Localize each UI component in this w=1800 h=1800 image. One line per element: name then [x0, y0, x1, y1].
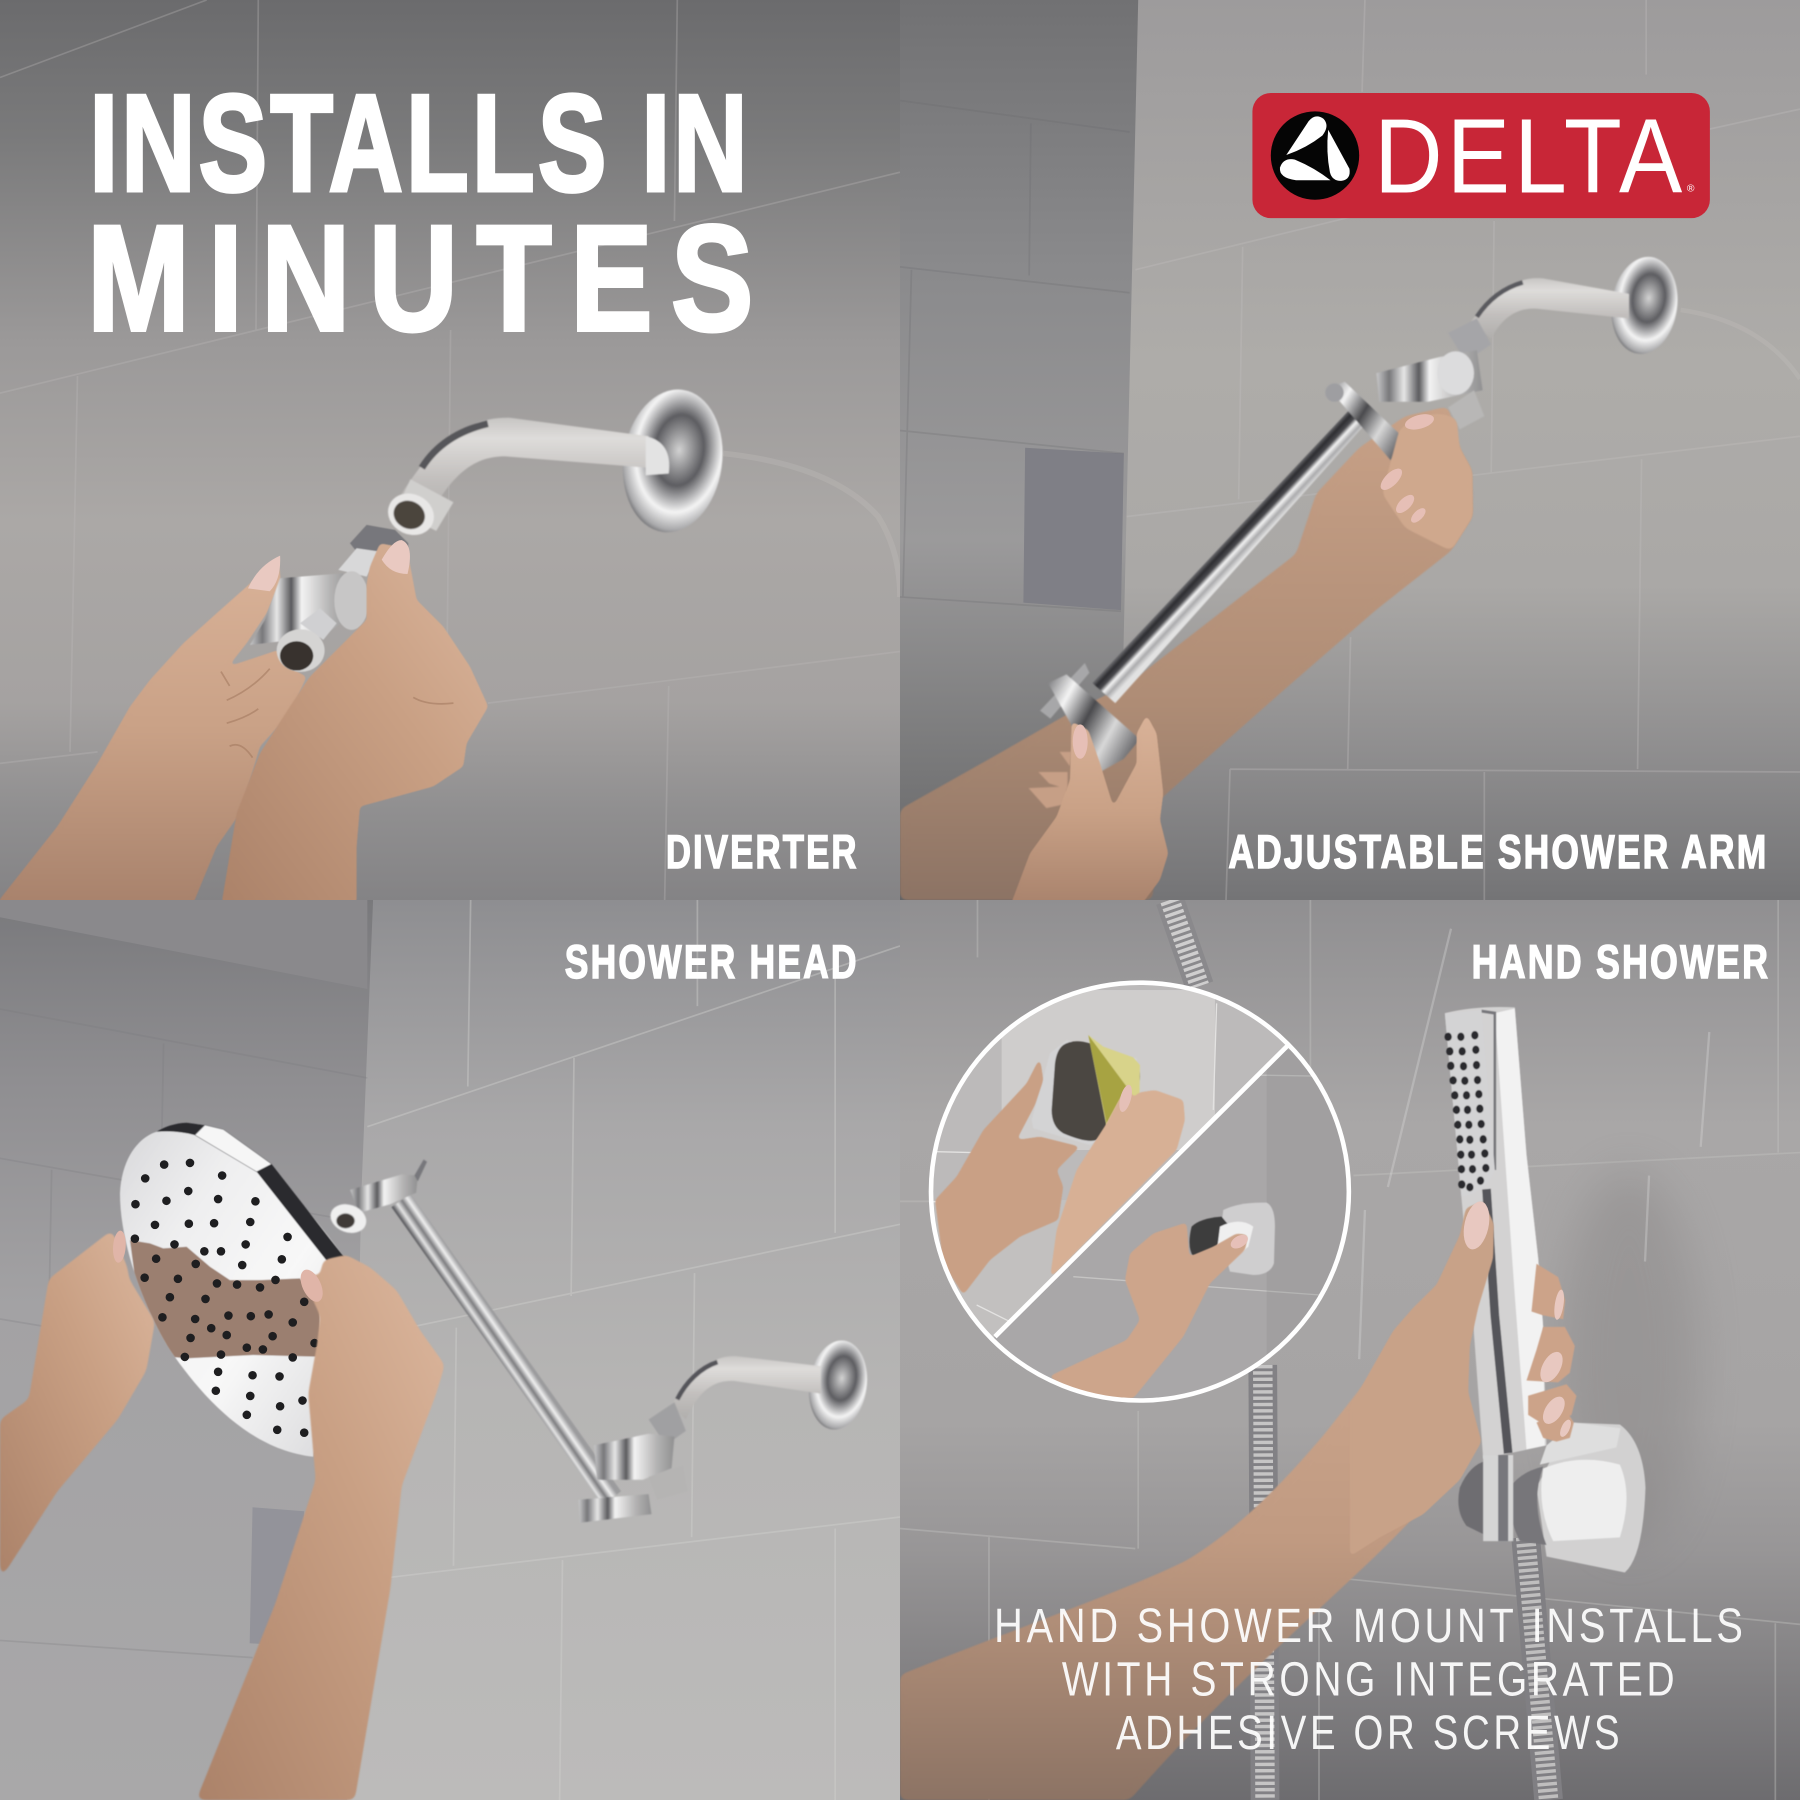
fingernail	[1228, 1232, 1250, 1251]
finger creases	[221, 669, 453, 758]
circle border	[931, 983, 1349, 1401]
forearm and upper hand	[900, 406, 1473, 900]
spray nozzles	[135, 1163, 315, 1433]
hose	[1170, 900, 1549, 1800]
title: MINUTES	[87, 194, 772, 362]
shower arm fixture	[579, 1337, 873, 1523]
fingernail	[1119, 1084, 1132, 1112]
fingers	[1527, 1264, 1576, 1442]
title	[87, 67, 772, 362]
wall background	[0, 0, 900, 900]
wall background	[900, 0, 1800, 900]
shower arm fixture	[381, 383, 732, 542]
right hand and arm	[196, 1255, 445, 1800]
right hand	[222, 543, 488, 903]
caption: ADHESIVE OR SCREWS	[1116, 1706, 1623, 1760]
hand shower	[1350, 1007, 1645, 1573]
inset lower wall	[1073, 1074, 1319, 1296]
wall mount	[1189, 1203, 1275, 1275]
diverter body	[250, 525, 408, 672]
panel: hand shower	[900, 900, 1800, 1800]
logo wordmark: DELTA	[1374, 97, 1686, 215]
adjustable rod	[1040, 382, 1408, 775]
lower hand fingers	[1029, 752, 1071, 808]
inset upper wall	[934, 985, 1285, 1338]
registered mark: ®	[1687, 184, 1695, 195]
wall background	[0, 900, 900, 1800]
shower head	[120, 1123, 347, 1457]
hand pressing mount	[1048, 1222, 1248, 1398]
fingers over clamp	[1382, 414, 1473, 551]
fingernails	[248, 540, 410, 591]
wall bracket	[1458, 1423, 1645, 1573]
fingernails	[1459, 1198, 1573, 1439]
hand peeling backing	[1050, 1085, 1185, 1278]
mount with adhesive backing	[1051, 1034, 1140, 1142]
panel: shower head	[0, 900, 900, 1800]
panel: adjustable shower arm	[900, 0, 1800, 900]
diagonal divider	[995, 1045, 1288, 1337]
hand holding mount	[935, 1057, 1080, 1295]
adjustable rod	[326, 1159, 621, 1506]
left hand and arm	[0, 1230, 155, 1580]
fingernails	[112, 1230, 327, 1305]
logo: Delta	[1252, 93, 1710, 218]
spray nozzles	[1448, 1035, 1486, 1187]
forearm	[900, 1353, 1417, 1800]
lower hand	[1010, 715, 1168, 907]
wall background	[900, 900, 1800, 1800]
gripping hand	[1350, 1201, 1494, 1556]
caption	[994, 1599, 1747, 1760]
shower arm fixture	[1376, 252, 1684, 429]
left hand	[0, 557, 307, 903]
panel: diverter	[0, 0, 900, 900]
reflection of hands	[130, 1240, 320, 1358]
wand	[1445, 1007, 1547, 1459]
fingernails	[1073, 411, 1436, 759]
logo mark	[1271, 111, 1359, 200]
inset circle: mounting steps	[928, 980, 1352, 1403]
